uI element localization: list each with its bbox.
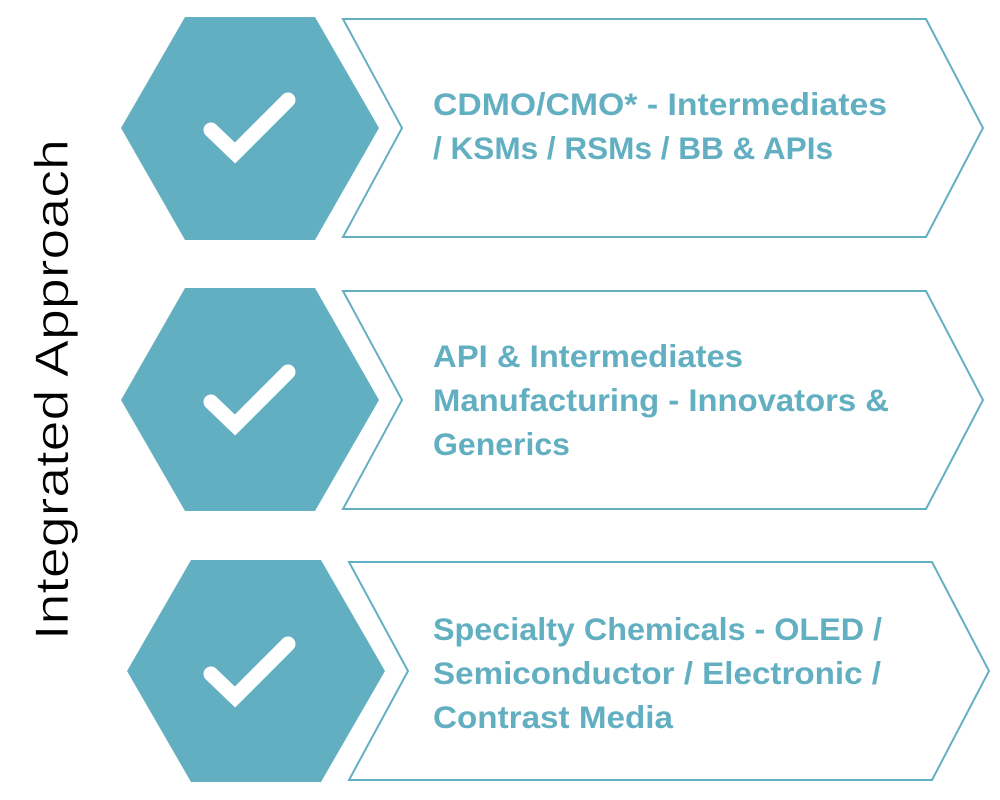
- text: API and Intermediates: Generics: [433, 426, 570, 462]
- text: Specialty Chemicals: [433, 611, 882, 735]
- text: Specialty Chemicals: Contrast Media: [433, 699, 674, 735]
- text: API and Intermediates: Manufacturing - Innovators &: [433, 382, 889, 418]
- text: Specialty Chemicals: Semiconductor / Electronic /: [433, 655, 881, 691]
- text: CDMO/CMO: [433, 86, 887, 166]
- panel: chevron 2: [343, 291, 983, 509]
- text: API and Intermediates: [433, 338, 889, 462]
- title: Integrated Approach: Integrated Approach: [25, 139, 78, 640]
- text: Specialty Chemicals: Specialty Chemicals - OLED /: [433, 611, 882, 647]
- text: CDMO/CMO: CDMO/CMO* - Intermediates: [433, 86, 887, 122]
- panel: chevron 3: [349, 562, 989, 780]
- text: CDMO/CMO: / KSMs / RSMs / BB & APIs: [433, 130, 833, 166]
- text: API and Intermediates: API & Intermediates: [433, 338, 743, 374]
- icon: hexagon with check 3: [127, 560, 385, 782]
- row 2: [121, 288, 983, 511]
- panel: chevron 1: [343, 19, 983, 237]
- row 1: [121, 17, 983, 240]
- icon: hexagon with check 1: [121, 17, 379, 240]
- icon: hexagon with check 2: [121, 288, 379, 511]
- row 3: [127, 560, 989, 782]
